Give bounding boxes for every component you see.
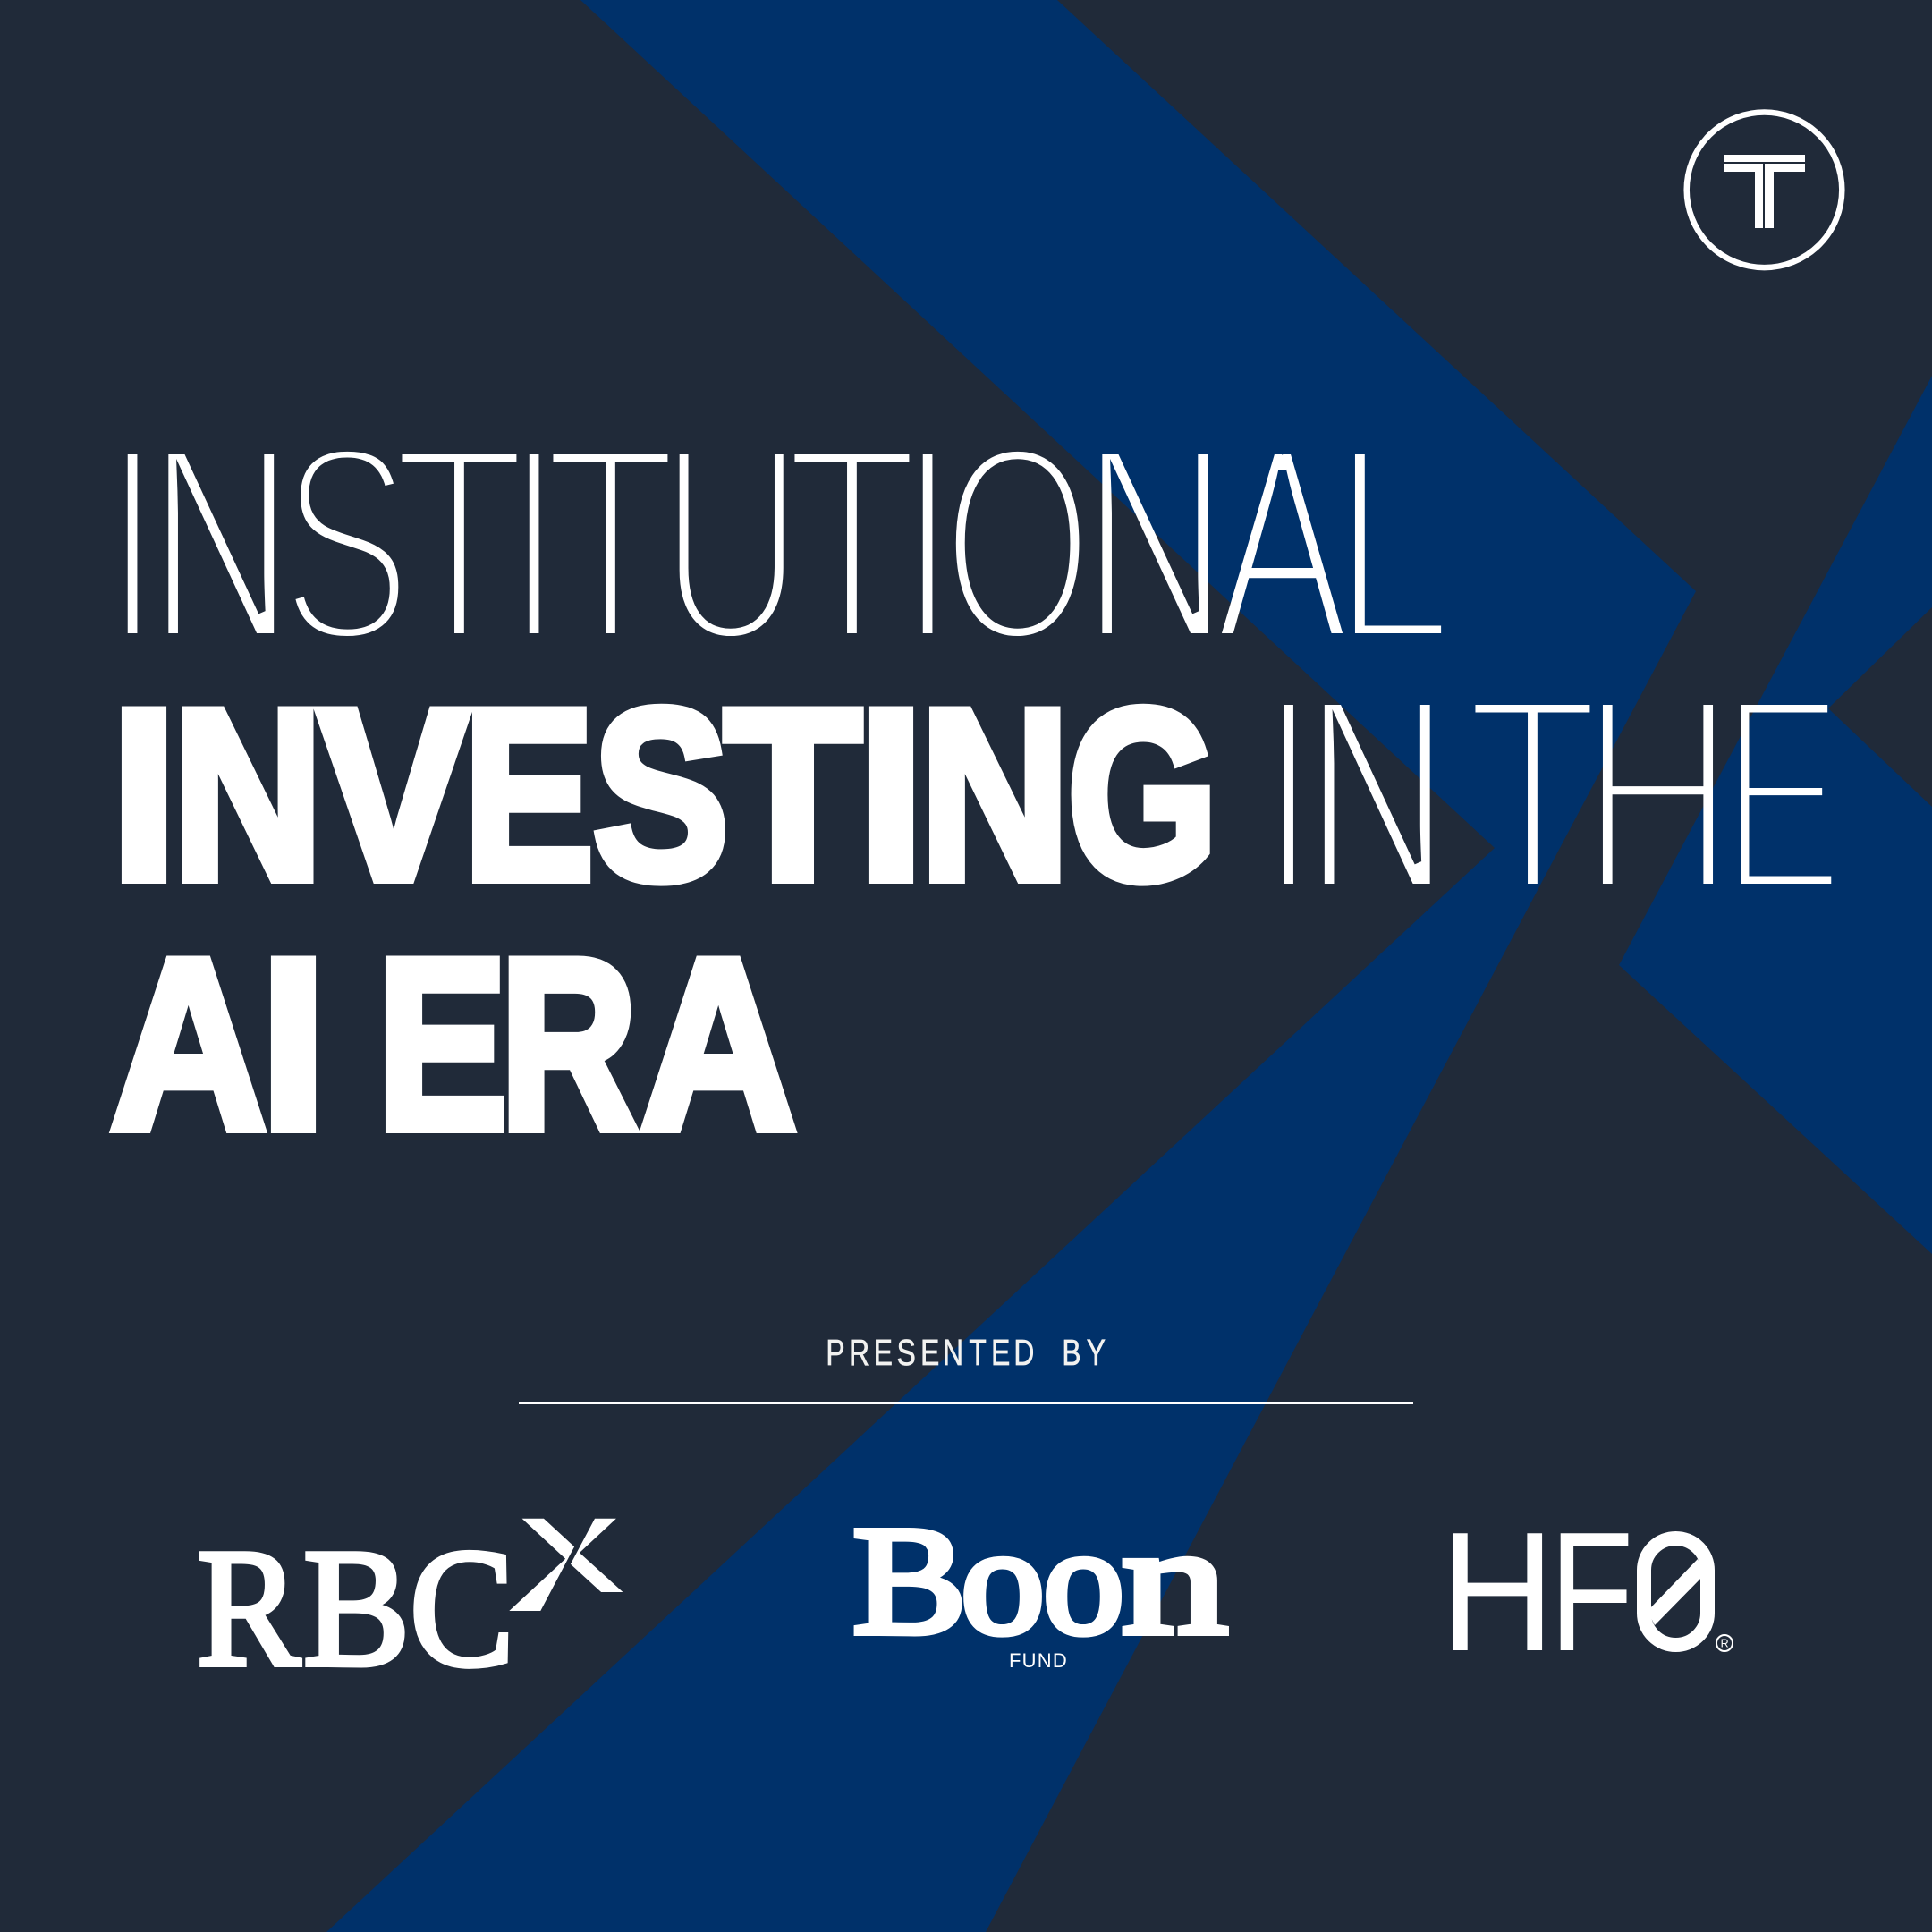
title line 1: INSTITUTIONAL: U [659, 388, 803, 700]
title line 2 bold: INVESTING: E [463, 660, 594, 930]
logo: RBCx [197, 1514, 623, 1701]
title line 2 thin: IN THE: I [1258, 639, 1318, 951]
logo: HF0: F [1549, 1497, 1633, 1687]
title line 2 thin: IN THE: E [1722, 639, 1843, 951]
title line 2 bold: INVESTING: S [593, 660, 729, 930]
logo: Boon Fund: B [853, 1496, 966, 1666]
logo: RBCx: C [410, 1514, 514, 1701]
title line 2 bold: INVESTING: G [1068, 660, 1217, 930]
icon: circled T logo [1687, 113, 1842, 267]
title line 3 bold: AI ERA: R [500, 910, 637, 1180]
logo: Boon Fund: o [1043, 1496, 1124, 1666]
title line 1: INSTITUTIONAL: O [942, 388, 1093, 700]
title line 2 thin: IN THE: H [1580, 639, 1736, 951]
title line 1: INSTITUTIONAL: I [504, 388, 564, 700]
background: large blue chevron [326, 0, 1696, 1932]
presented by label: PRESENTED BY [826, 1332, 1106, 1373]
title line 3 bold: AI ERA: E [377, 910, 507, 1180]
logo: HF0 [1439, 1497, 1733, 1687]
logo: Boon Fund: o [961, 1496, 1045, 1666]
title line 1: INSTITUTIONAL: T [543, 388, 678, 700]
title line 3 bold: AI ERA: A [640, 910, 796, 1180]
title line 2 bold: INVESTING: I [111, 660, 177, 930]
title line 2 bold: INVESTING: N [920, 660, 1070, 930]
logo: HF0: R [1721, 1637, 1729, 1649]
title line 2 bold: INVESTING: N [174, 660, 323, 930]
logo: Boon Fund: FUND [1009, 1649, 1068, 1672]
logo: Boon Fund: n [1123, 1496, 1227, 1666]
title line 1: INSTITUTIONAL: L [1332, 388, 1453, 700]
title line 2 bold: INVESTING: V [318, 660, 470, 930]
title line 1: INSTITUTIONAL: A [1216, 390, 1349, 696]
title line 2 bold: INVESTING: I [858, 660, 924, 930]
title line 3 bold: AI ERA: I [260, 910, 326, 1180]
logo: Boon Fund [853, 1496, 1227, 1672]
background: right blue chevron [1619, 376, 1932, 1254]
title line 2 bold: INVESTING: T [724, 660, 861, 930]
title line 1: INSTITUTIONAL: S [281, 388, 412, 700]
logo: HF0: H [1439, 1497, 1555, 1687]
title line 2 thin: IN THE: T [1465, 639, 1600, 951]
title line 1: INSTITUTIONAL: I [897, 388, 958, 700]
title line 1: INSTITUTIONAL: T [392, 388, 527, 700]
logo: RBCx: B [303, 1514, 410, 1701]
title line 2 thin: IN THE: N [1304, 640, 1450, 946]
logo: RBCx: R [197, 1514, 301, 1701]
title line 1: INSTITUTIONAL: N [1082, 390, 1228, 696]
title line 3 bold: AI ERA: A [110, 910, 267, 1180]
title line 1: INSTITUTIONAL: N [148, 390, 294, 696]
title line 1: INSTITUTIONAL: I [102, 388, 163, 700]
title line 1: INSTITUTIONAL: T [784, 388, 919, 700]
